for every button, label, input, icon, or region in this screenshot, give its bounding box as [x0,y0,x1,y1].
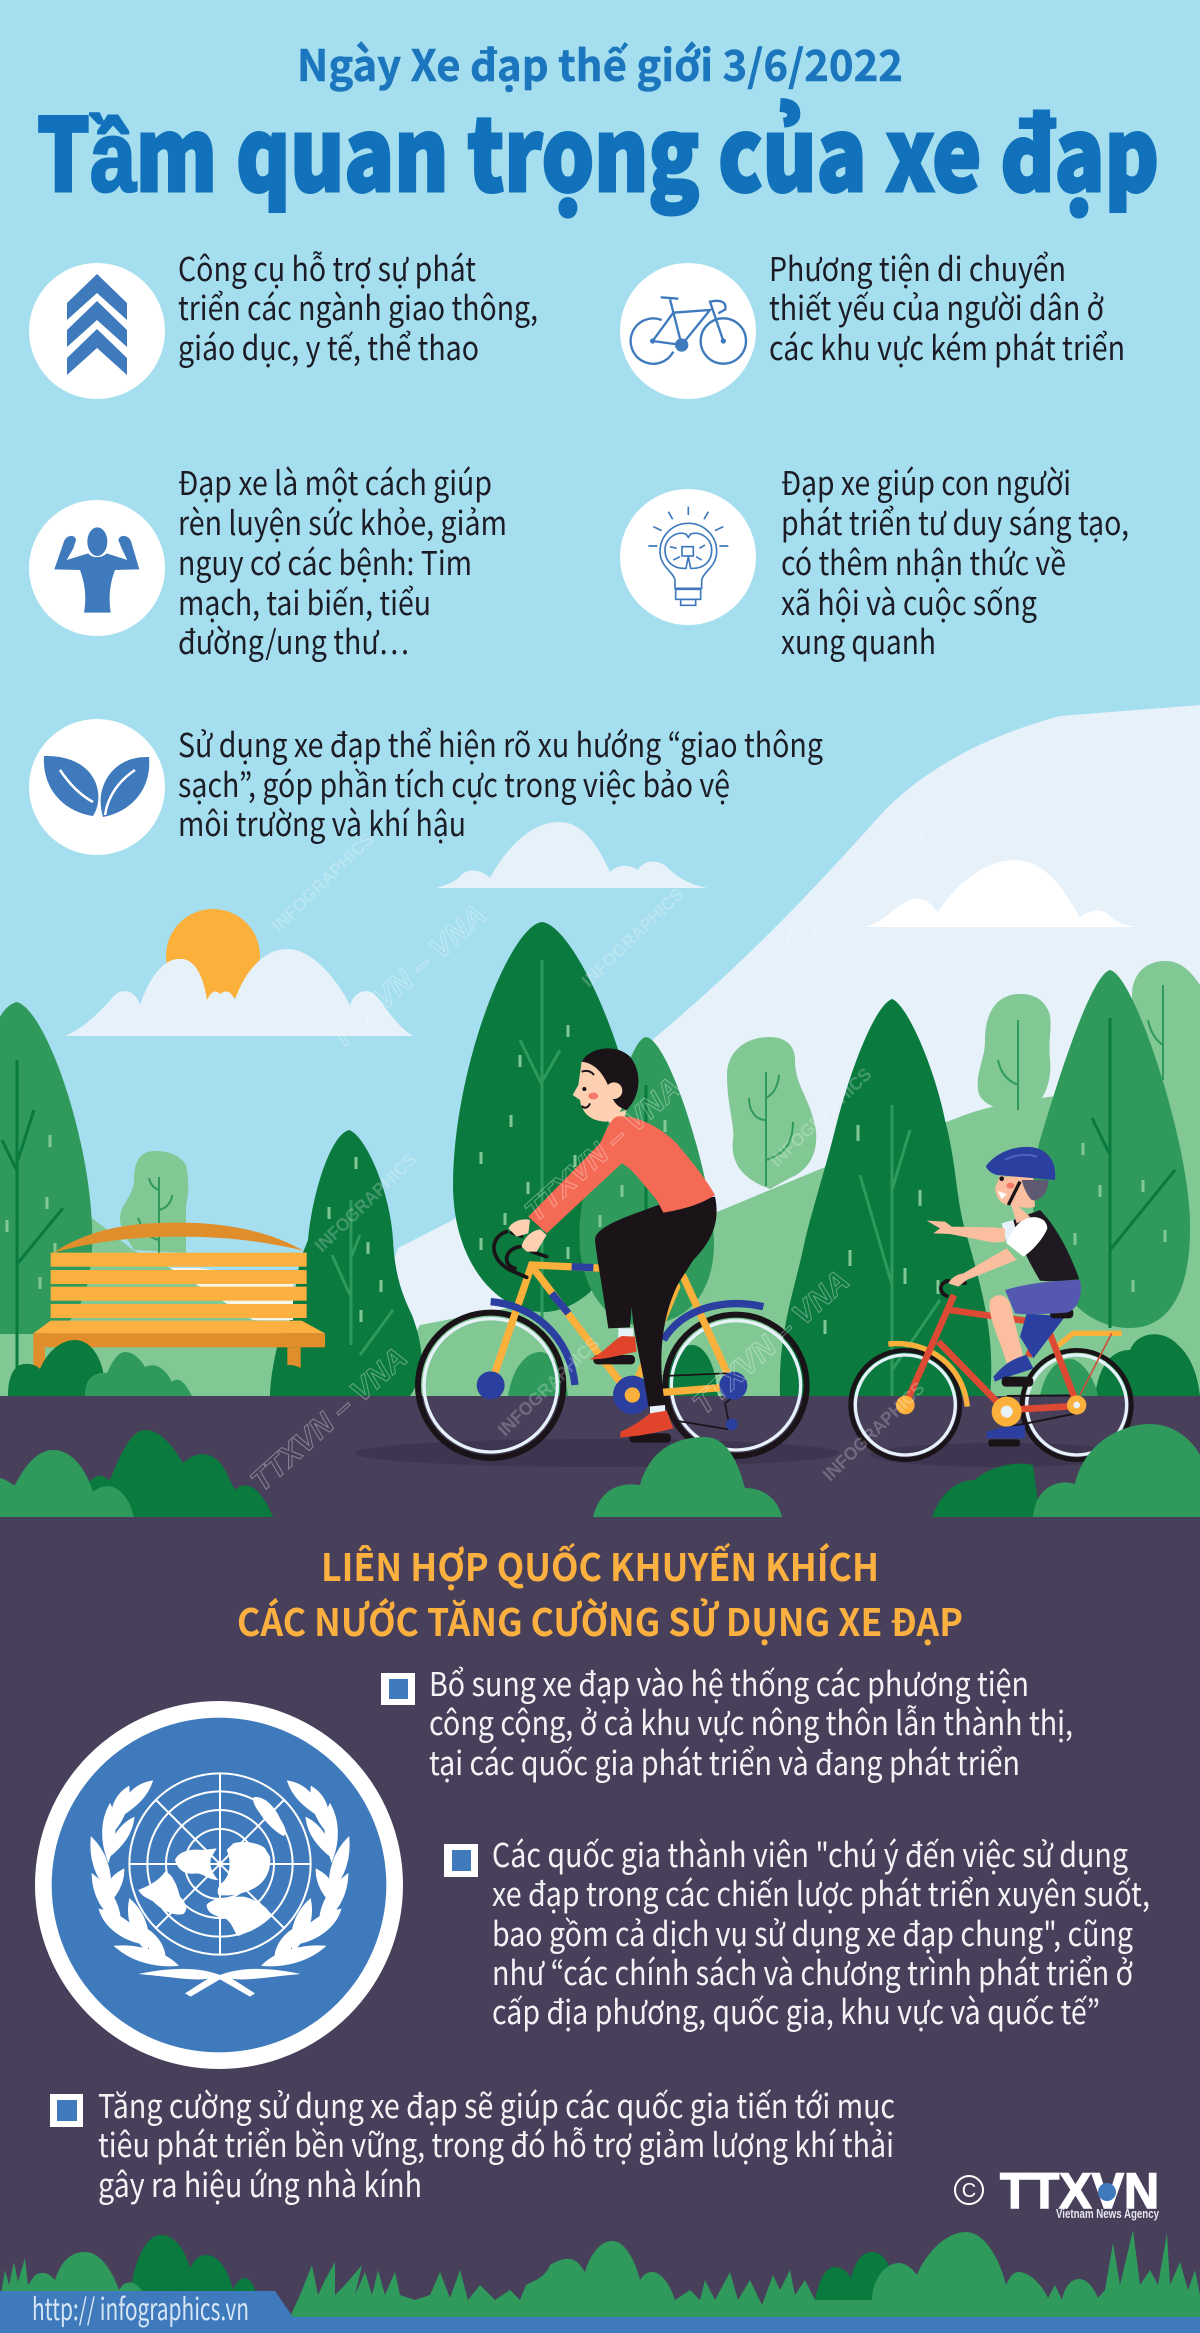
watermarks: TTXVN – VNA [324,898,493,1055]
icon: leaves [29,719,165,855]
text: health [178,457,507,664]
item 2: transport [620,243,1125,399]
back bushes along road [508,1334,1200,1396]
watermarks [245,809,940,1498]
tree: dark near bench [270,1130,422,1396]
tree: light at back right 1 [978,994,1051,1110]
heading: UN encourages: LIÊN HỢP QUỐC KHUYẾN KHÍCH [321,1537,879,1592]
heading: UN encourages [237,1537,963,1647]
tree: big dark behind man [453,922,640,1320]
child's vest and shirt [1002,1210,1079,1281]
text: development [178,243,538,370]
man's hands [508,1219,547,1252]
watermarks: TTXVN – VNA [245,1341,414,1498]
text: creativity: xung quanh [781,616,936,664]
tree: mid green behind man [580,1037,714,1325]
tree: dark at right [780,999,991,1396]
child's arms [927,1221,1017,1287]
cloud 1 [65,949,413,1036]
landscape: left green hill [0,1218,300,1396]
man's bicycle frame [477,1232,763,1430]
text: development: triển các ngành giao thông, [178,282,538,330]
text: transport: các khu vực kém phát triển [769,322,1125,370]
bullet 1 text [429,1658,1073,1785]
road and lower panel background [0,1396,1200,2333]
landscape: green hill [380,1087,1200,1396]
watermarks: TTXVN – VNA [519,1071,688,1228]
man's head [573,1048,638,1127]
bullet 1 text: tại các quốc gia phát triển và đang phát triển [429,1737,1020,1785]
text: transport: Phương tiện di chuyển [769,243,1066,291]
bottom bushes and grass [0,2230,1200,2317]
man's pedal and shoes [589,1328,673,1443]
text: creativity: có thêm nhận thức về [781,537,1066,585]
logo: TTXVN: C [962,2180,976,2202]
man's bicycle wheels [418,1313,807,1458]
text: environment: sạch”, góp phần tích cực trong việc bảo vệ [178,759,730,807]
child's head and helmet [986,1147,1055,1223]
text: health: rèn luyện sức khỏe, giảm [178,497,507,545]
watermarks: INFOGRAPHICS [311,1149,420,1256]
child's bicycle frame [888,1281,1122,1427]
landscape: mountain [380,705,1200,1396]
bullet marker 1 [381,1673,415,1705]
man riding bicycle [418,1048,807,1458]
icon: muscle figure [29,500,165,636]
tree: mid at right [1032,970,1190,1328]
text: health: đường/ung thư… [178,616,409,664]
bench sunlit gap [170,1268,293,1320]
bullet marker 3 [50,2094,83,2127]
bench foreground bushes [8,1340,340,1396]
watermarks: INFOGRAPHICS [268,829,377,936]
bullet 2 text: cấp địa phương, quốc gia, khu vực và quốc tế” [492,1986,1100,2034]
text: creativity: xã hội và cuộc sống [781,577,1037,625]
icon: bicycle [620,263,756,399]
bench [33,1223,325,1371]
tree: light at back right 2 [1132,961,1200,1105]
child's bicycle wheels [851,1350,1131,1460]
icon: light bulb brain [620,489,756,625]
bullet 2 [444,1829,1150,2034]
bullet 1 text: công cộng, ở cả khu vực nông thôn lẫn thành thị, [429,1697,1073,1745]
man's trousers [595,1197,717,1407]
text: creativity [781,457,1129,664]
bullet 1 text: Bổ sung xe đạp vào hệ thống các phương tiện [429,1658,1029,1706]
text: creativity: Đạp xe giúp con người [781,457,1071,505]
watermarks: TTXVN – VNA [771,809,940,966]
tree: light beside man [727,1037,816,1189]
logo: TTXVN: Vietnam News Agency [1056,2206,1160,2221]
item 4: creativity [620,457,1129,664]
cloud 2 [436,822,708,888]
sun [166,909,260,1003]
text: development: Công cụ hỗ trợ sự phát [178,243,476,291]
text: environment: môi trường và khí hậu [178,798,466,846]
text: development: giáo dục, y tế, thể thao [178,322,479,370]
text: health: mạch, tai biến, tiểu [178,577,431,625]
bullet 3 text: Tăng cường sử dụng xe đạp sẽ giúp các quốc gia tiến tới mục [98,2080,895,2128]
child riding bicycle [851,1147,1131,1460]
bullet 3 text: tiêu phát triển bền vững, trong đó hỗ trợ giảm lượng khí thải [98,2119,894,2167]
subtitle: Ngày Xe đạp thế giới 3/6/2022 [297,32,903,94]
foreground bushes [0,1424,1200,1517]
child's legs and shoes [987,1295,1073,1447]
text: environment [178,719,823,846]
footer url tag: http:// infographics.vn [32,2285,249,2329]
text: creativity: phát triển tư duy sáng tạo, [781,497,1129,545]
laurel ribbon [138,1969,301,1997]
watermarks: INFOGRAPHICS [494,1333,603,1440]
bullet marker 2 [444,1844,478,1877]
watermarks: INFOGRAPHICS [578,884,687,991]
item 5: environment [29,719,823,855]
heading: UN encourages: CÁC NƯỚC TĂNG CƯỜNG SỬ DỤNG XE ĐẠP [237,1592,963,1647]
bullet 3 text [98,2080,895,2207]
bullet 3 [50,2080,895,2207]
man's sweater [528,1116,715,1233]
sky background [0,0,1200,1400]
bullet 1 [381,1658,1073,1785]
icon: UN emblem [35,1701,403,2069]
tree: left edge [0,1002,92,1396]
tree: light small near bench [120,1151,188,1265]
globe continents [138,1797,286,1936]
watermarks: INFOGRAPHICS [766,1064,875,1171]
icon: chevrons [29,263,165,399]
globe grid [129,1773,311,1955]
left laurel [91,1782,177,1965]
text: environment: Sử dụng xe đạp thể hiện rõ xu hướng “giao thông [178,719,823,767]
text: health: nguy cơ các bệnh: Tim [178,537,472,585]
road shadows [354,1439,1130,1467]
item 1: development [29,243,538,399]
child's shorts [1005,1280,1081,1314]
footer strip [0,2317,1200,2333]
text: health: Đạp xe là một cách giúp [178,457,492,505]
logo: TTXVN: TTXVN [1000,2163,1159,2219]
right laurel [263,1782,349,1965]
cloud 3 [865,860,1136,927]
text: transport [769,243,1125,370]
watermarks: INFOGRAPHICS [819,1378,928,1485]
bullet 2 text [492,1829,1150,2034]
bullet 3 text: gây ra hiệu ứng nhà kính [98,2159,422,2207]
item 3: health [29,457,507,664]
watermarks: TTXVN – VNA [687,1264,856,1421]
text: transport: thiết yếu của người dân ở [769,282,1104,330]
